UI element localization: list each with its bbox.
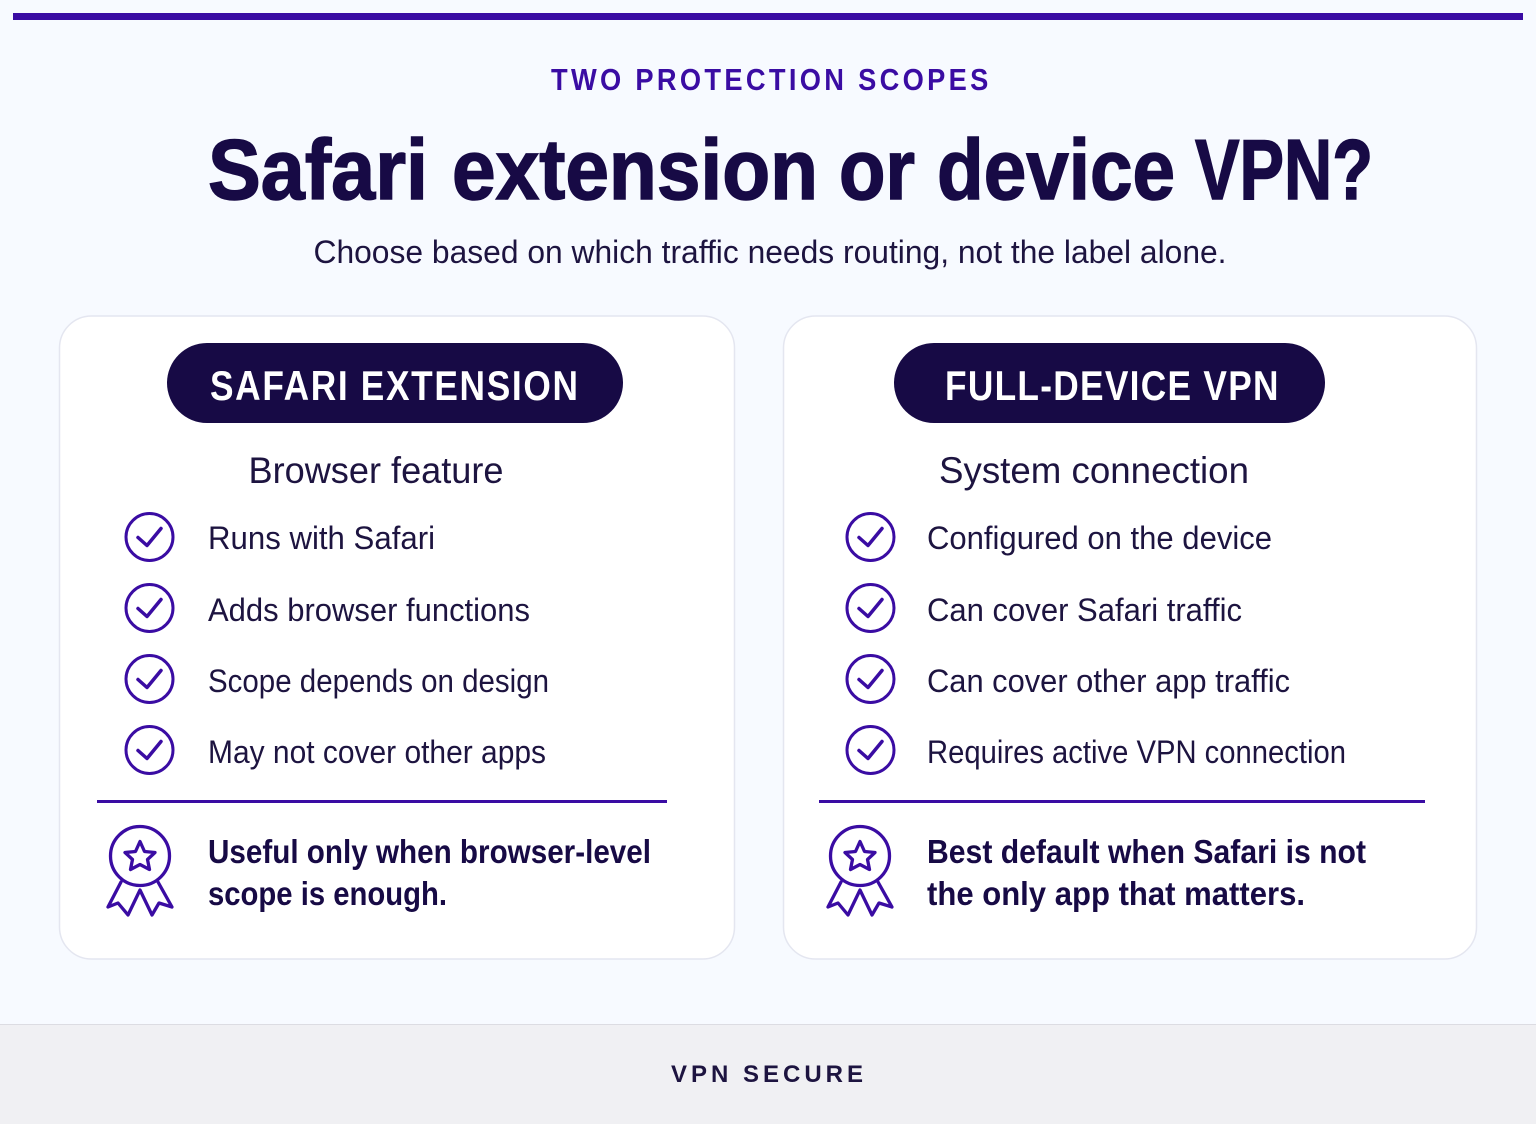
verdict text: the only app that matters. (927, 875, 1305, 912)
top accent bar (13, 13, 1523, 20)
item 3: Scope depends on design (208, 663, 549, 699)
title: Safari (208, 123, 428, 218)
subtitle: Choose based on which traffic needs routing, not the label alone. (314, 234, 1226, 270)
item 3 (847, 656, 1290, 702)
verdict text: Useful only when browser-level (208, 833, 651, 870)
pill heading (894, 343, 1325, 423)
pill heading: FULL-DEVICE VPN (945, 363, 1278, 410)
item 1: Configured on the device (927, 520, 1272, 556)
item 4: Requires active VPN connection (927, 734, 1346, 770)
verdict text (208, 833, 651, 912)
title: device (937, 123, 1175, 218)
panel: Full-device VPN (784, 316, 1476, 959)
item 4 (126, 726, 546, 774)
item 1 (126, 514, 435, 560)
title: or (839, 123, 915, 218)
title (208, 123, 1373, 218)
eyebrow label: TWO PROTECTION SCOPES (551, 63, 988, 97)
checklist (847, 514, 1346, 774)
item 4: May not cover other apps (208, 734, 546, 770)
panel background (60, 316, 734, 959)
item 2: Can cover Safari traffic (927, 592, 1242, 628)
panel: Safari extension (60, 316, 734, 959)
subheading: System connection (939, 450, 1249, 491)
icon: award ribbon (108, 826, 172, 915)
panel background (784, 316, 1476, 959)
title: VPN? (1195, 123, 1373, 218)
title: extension (452, 123, 818, 218)
divider (97, 800, 667, 803)
divider (819, 800, 1425, 803)
item 2: Adds browser functions (208, 592, 530, 628)
item 4 (847, 726, 1346, 774)
verdict text: scope is enough. (208, 875, 447, 912)
item 2 (126, 584, 530, 632)
pill heading: SAFARI EXTENSION (210, 363, 578, 410)
footer (0, 1024, 1536, 1124)
checklist (126, 514, 549, 774)
verdict text: Best default when Safari is not (927, 833, 1366, 870)
item 3: Can cover other app traffic (927, 663, 1290, 699)
item 2 (847, 584, 1242, 632)
icon: award ribbon (828, 826, 892, 915)
item 3 (126, 656, 549, 702)
subheading: Browser feature (248, 450, 504, 491)
item 1: Runs with Safari (208, 520, 435, 556)
footer brand: VPN SECURE (671, 1061, 863, 1088)
pill heading (167, 343, 623, 423)
verdict text (927, 833, 1366, 912)
item 1 (847, 514, 1272, 560)
